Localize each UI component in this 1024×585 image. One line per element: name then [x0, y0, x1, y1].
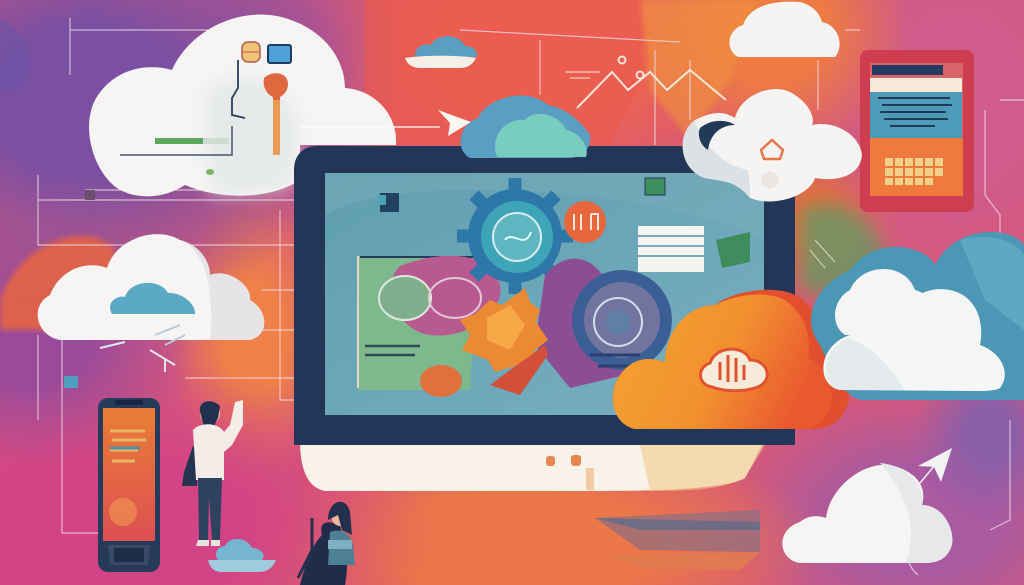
large orange cloud: [613, 290, 849, 429]
orange oval: [420, 365, 462, 397]
background shapes: [0, 0, 890, 330]
cloud: bottom right: [782, 463, 952, 563]
green square: [716, 232, 750, 268]
stand dots: [546, 455, 594, 490]
progress bar: [120, 126, 232, 155]
icon: small window: [268, 45, 291, 63]
gear: orange: [460, 288, 548, 395]
green document panel: [358, 256, 478, 390]
cloud: left white with teal: [38, 234, 264, 345]
reflection streaks: [595, 510, 760, 570]
purple blob and gear: [535, 259, 672, 388]
text lines card: [638, 226, 704, 272]
arrow: bottom right: [910, 448, 952, 495]
small cloud: bottom: [208, 539, 276, 572]
small connector icons: [64, 190, 175, 388]
teal cloud: center top: [461, 95, 590, 158]
white cloud: upper right: [683, 89, 862, 201]
badge: orange: [564, 201, 606, 243]
icon: cloud emblem: [700, 349, 767, 391]
small navy square: [377, 193, 399, 212]
arrow: to center cloud: [300, 110, 471, 136]
icon: small database: [242, 42, 260, 62]
gear: blue: [457, 178, 573, 294]
pink blob with circles: [379, 256, 500, 336]
monitor screen: [325, 173, 764, 415]
monitor bezel: [294, 146, 795, 445]
icon: pin: [264, 73, 288, 155]
white cloud: right back: [835, 269, 935, 335]
cloud connector line: [232, 60, 245, 118]
white cloud: top right: [729, 2, 840, 57]
line chart: [565, 56, 726, 108]
icon: phone: [98, 398, 160, 572]
small cloud: top center: [405, 36, 477, 68]
large white cloud: top left: [89, 15, 396, 196]
green dot: [206, 169, 214, 175]
figure: standing person: [182, 400, 243, 546]
figure: seated person: [298, 502, 355, 585]
panel: red tablet: [860, 50, 974, 212]
cloud cluster: right, teal: [811, 232, 1024, 400]
white cloud: right front: [823, 289, 1005, 391]
panel: monitor: [294, 146, 795, 491]
monitor stand base: [300, 440, 765, 491]
small green chip: [645, 178, 665, 195]
